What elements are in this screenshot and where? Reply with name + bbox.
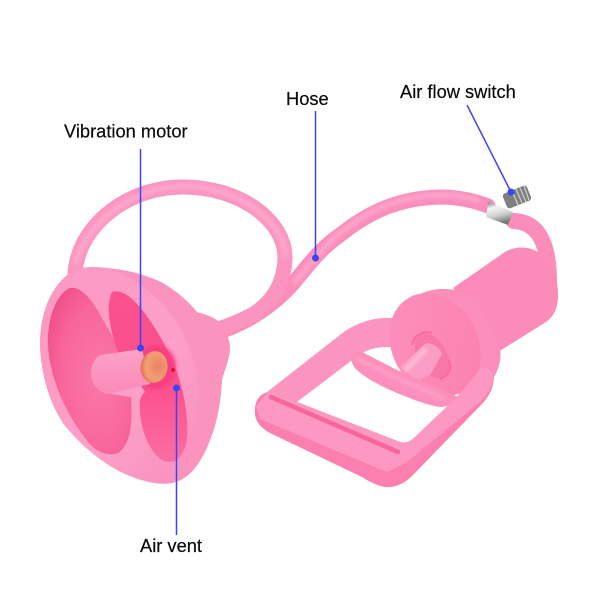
vibration motor tip xyxy=(138,349,170,385)
cup silhouette xyxy=(40,267,230,484)
callout: vibration motor: Vibration motor xyxy=(64,120,188,142)
hose run to switch xyxy=(222,195,488,331)
cup rim xyxy=(40,267,198,484)
air flow switch fitting xyxy=(486,185,532,225)
pump handle hoop xyxy=(351,351,458,407)
callout: air flow switch xyxy=(400,81,516,196)
collar xyxy=(392,289,501,396)
pump handle front band xyxy=(255,368,494,487)
cylinder xyxy=(453,248,558,352)
threaded valve xyxy=(502,185,532,209)
piston rod xyxy=(400,343,442,381)
band top xyxy=(256,368,494,472)
suction cup xyxy=(40,267,230,484)
air vent hole xyxy=(171,368,175,372)
callout: hose xyxy=(286,88,329,262)
hose to pump xyxy=(514,221,549,282)
hose loop xyxy=(75,186,285,329)
callout: air flow switch: Air flow switch xyxy=(400,81,516,102)
motor recess xyxy=(136,345,176,389)
pump handle rear band xyxy=(262,318,400,402)
band side xyxy=(255,368,494,487)
metal collar xyxy=(486,202,513,225)
front face xyxy=(372,277,498,413)
handle groove xyxy=(271,397,398,452)
callout: air vent xyxy=(140,384,202,556)
callout: hose: Hose xyxy=(286,88,329,109)
callout: vibration motor xyxy=(64,120,188,352)
left interior lobe xyxy=(48,288,132,454)
vibrator bullet xyxy=(91,349,150,394)
pump barrel xyxy=(372,248,558,413)
seal clip marks xyxy=(412,332,450,379)
seal recess xyxy=(407,328,457,384)
hose xyxy=(75,186,549,331)
callout: air vent: Air vent xyxy=(140,535,202,556)
right interior lobe xyxy=(109,291,187,462)
